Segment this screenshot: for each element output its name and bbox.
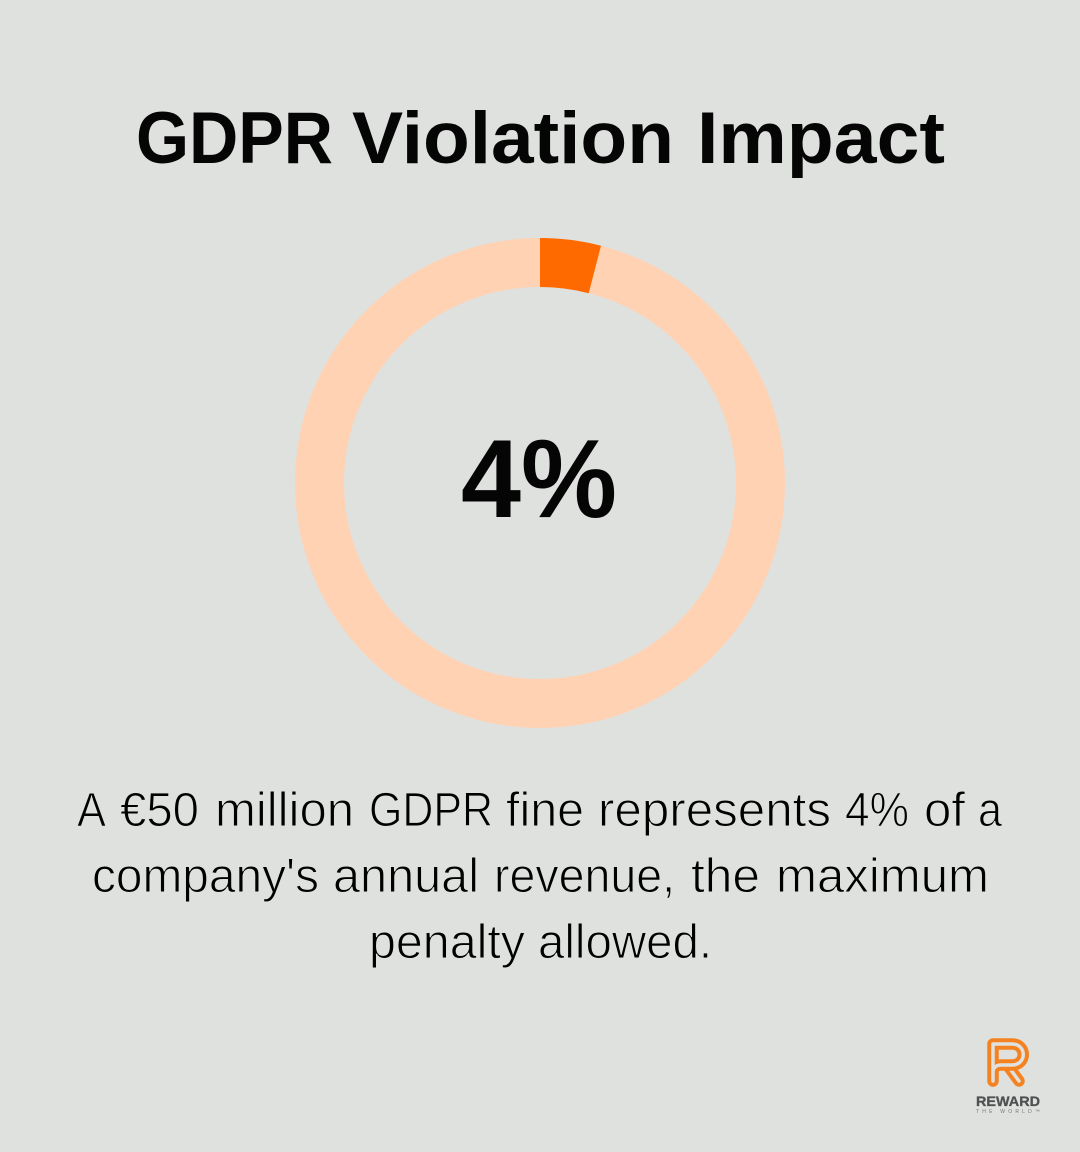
description text: a [978,784,1002,837]
donut chart [320,238,760,704]
description text: represents [598,784,831,837]
logo wordmark: REWARD [976,1093,1040,1109]
description text: penalty [369,916,525,969]
description text: GDPR [369,784,493,837]
description text: the [691,850,760,903]
description text: 4% [845,784,909,837]
description text: €50 [120,784,199,837]
icon: R mark [993,1044,1023,1081]
description text: of [924,784,966,837]
description text: maximum [776,850,989,903]
description text: company's [92,850,319,903]
title: Impact [697,98,945,179]
title: GDPR [136,98,333,179]
donut highlighted 4% segment [540,238,601,293]
donut track [320,262,760,704]
description text: allowed. [538,916,712,969]
description text [77,784,1002,969]
logo: Reward the World [976,1044,1040,1115]
logo tagline: THE WORLD™ [976,1109,1040,1115]
title: Violation [352,98,674,179]
description text: million [215,784,354,837]
description text: revenue, [494,850,675,903]
description text: annual [333,850,479,903]
title [136,98,945,179]
description text: fine [506,784,584,837]
center value: 4% [461,417,617,541]
description text: A [77,784,106,837]
